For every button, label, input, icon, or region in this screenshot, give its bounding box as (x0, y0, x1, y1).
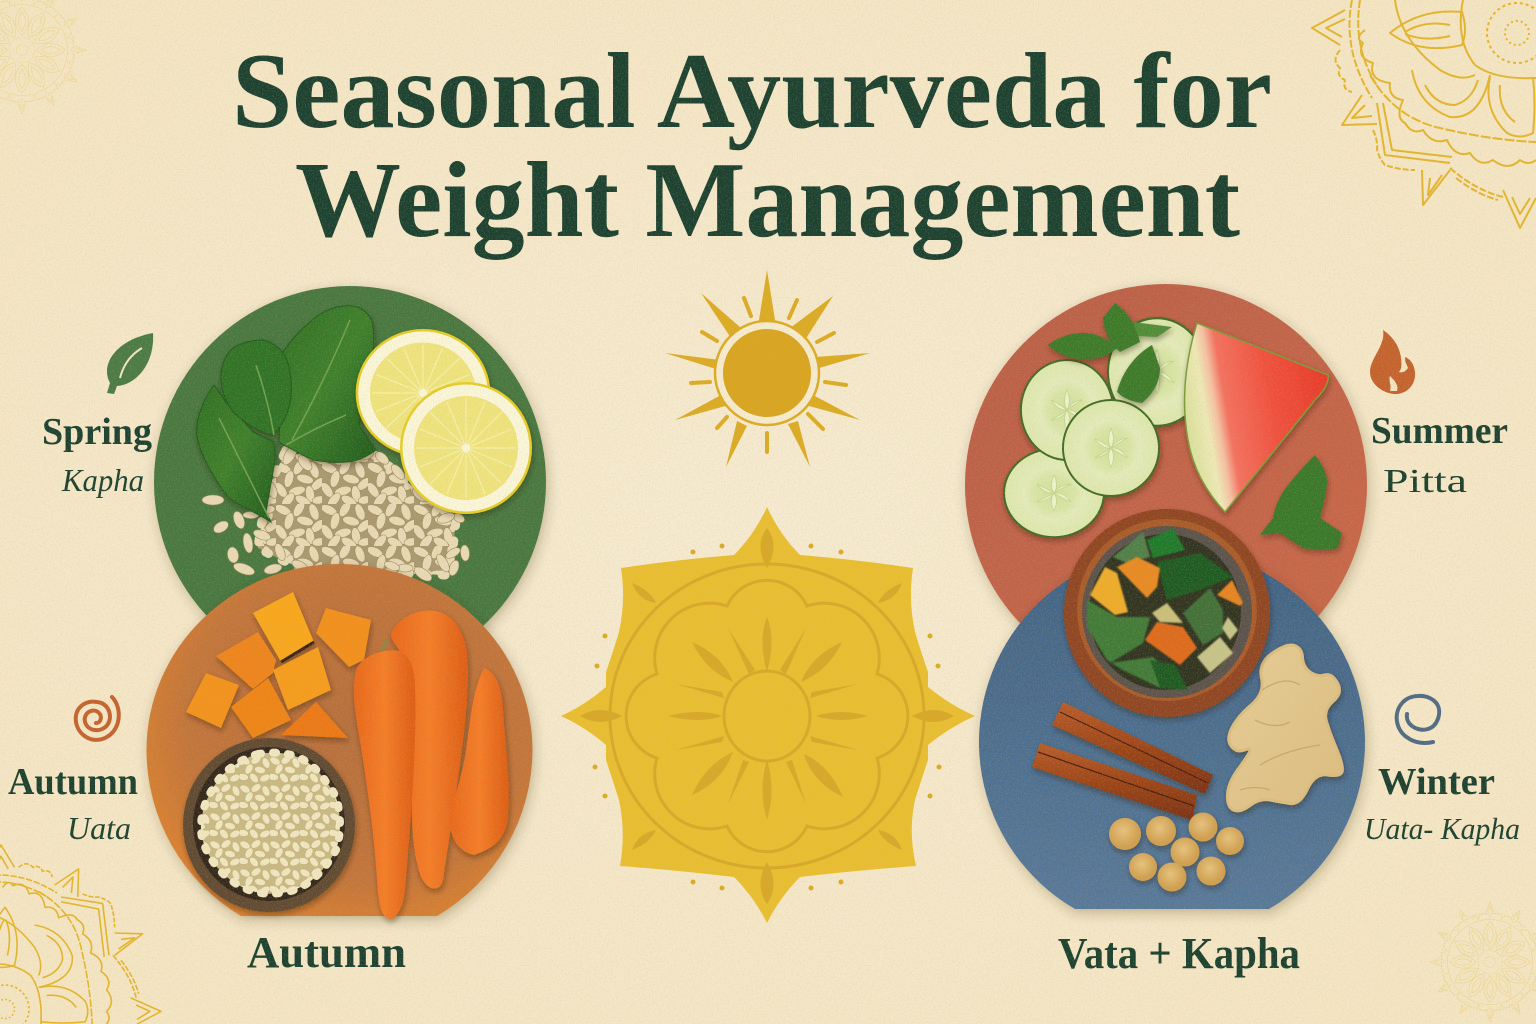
small sun icon (665, 270, 870, 467)
spinach leaves (197, 306, 376, 522)
icon: leaf (107, 333, 153, 394)
watermelon wedge (1185, 323, 1328, 512)
mandala line work (610, 564, 924, 868)
title (232, 32, 1272, 260)
mint sprig right (1260, 455, 1342, 550)
caption: Vata + Kapha: Vata + Kapha (1058, 929, 1300, 978)
title: Seasonal Ayurveda for (232, 32, 1272, 151)
wooden rice bowl (183, 738, 355, 912)
winter label (1364, 696, 1520, 846)
panel: autumn plate (146, 560, 532, 919)
orange plate (146, 564, 532, 916)
carrots (354, 610, 509, 919)
text: Summer: Summer (1371, 410, 1508, 452)
corner mandala: bottom right (1430, 902, 1536, 1022)
text: Autumn: Autumn (8, 761, 138, 803)
large golden mandala (561, 507, 975, 923)
text: Uata- Kapha: Uata- Kapha (1364, 811, 1520, 846)
title: Weight Management (295, 141, 1240, 260)
icon: orange spiral (76, 697, 119, 740)
cinnamon sticks (1032, 702, 1213, 820)
panel: winter plate (979, 549, 1365, 909)
red plate (965, 284, 1367, 686)
blue plate (979, 549, 1365, 909)
cucumber slices (1003, 317, 1207, 538)
corner mandala: bottom left (0, 845, 161, 1024)
lemon slices (356, 329, 532, 514)
autumn label (8, 697, 138, 846)
grains over plate edge (383, 560, 434, 584)
corner mandala: top right (1312, 0, 1536, 228)
spring label (42, 333, 153, 498)
soup bowl (1064, 509, 1270, 717)
grains (202, 443, 470, 578)
chickpeas (1109, 812, 1244, 892)
greens (1087, 528, 1233, 690)
mint sprig top (1048, 303, 1172, 403)
green plate (154, 286, 546, 678)
squash cubes (186, 592, 371, 738)
summer label (1370, 330, 1508, 500)
icon: blue spiral (1397, 696, 1439, 743)
icon: flame (1370, 330, 1415, 394)
text: Kapha: Kapha (61, 462, 144, 498)
corner mandala: top left (0, 0, 86, 114)
text: Winter: Winter (1378, 761, 1495, 803)
mandala star body (561, 507, 975, 923)
ginger root (1227, 645, 1342, 811)
panel: spring plate (154, 286, 546, 678)
bowl rim (1064, 509, 1270, 717)
mandala dots (592, 544, 942, 890)
soup (1082, 526, 1252, 698)
vegetable pieces (1090, 557, 1243, 673)
text: Uata: Uata (67, 810, 131, 846)
carrot stem (382, 640, 386, 651)
text: Spring: Spring (42, 411, 152, 453)
panel: summer plate (965, 284, 1367, 686)
caption: Autumn: Autumn (247, 928, 406, 977)
text: Pitta: Pitta (1383, 463, 1467, 500)
mandala inner rays (580, 528, 954, 904)
